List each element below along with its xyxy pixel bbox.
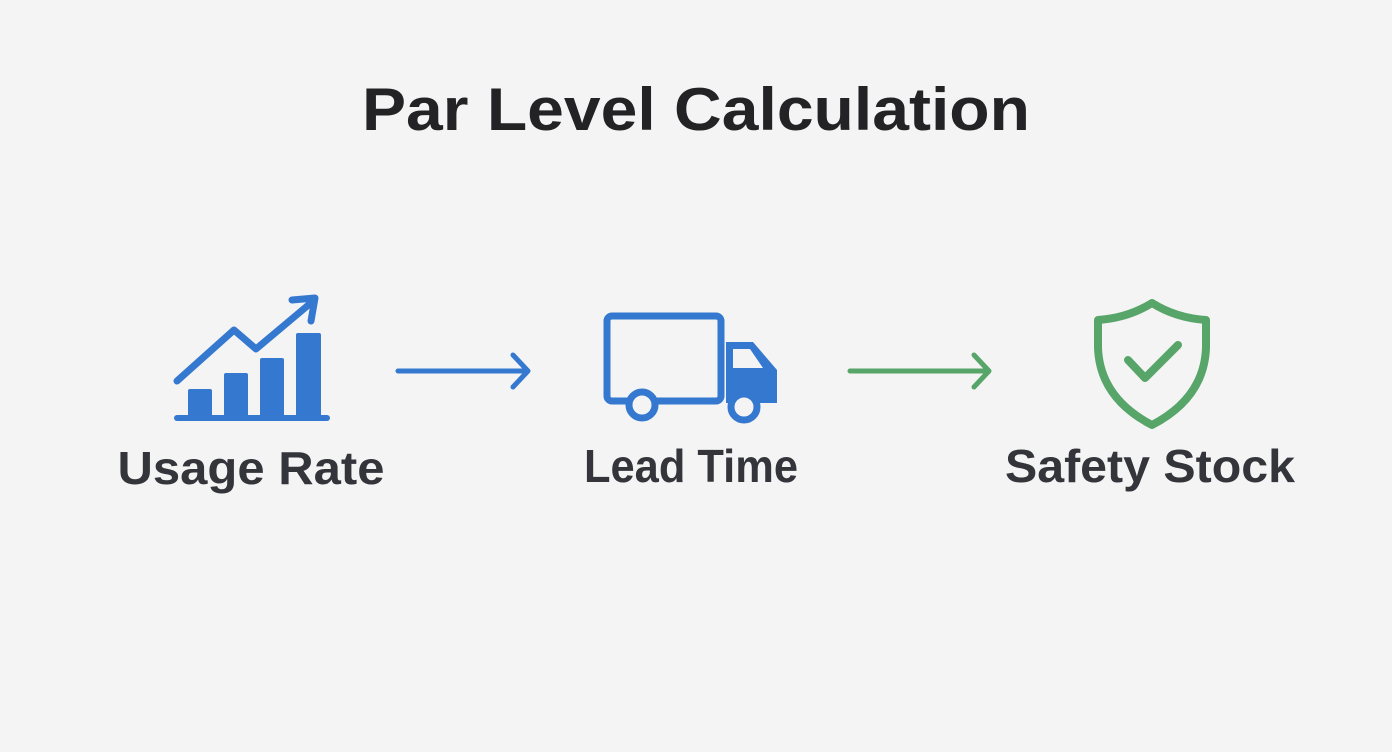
title: Par Level Calculation [362,76,1030,143]
arrow: green [850,355,989,387]
label: lead time: Lead Time [584,440,798,492]
icon: shield [1098,303,1206,425]
label: safety stock: Safety Stock [1005,440,1295,492]
label: usage rate: Usage Rate [118,442,384,494]
icon: truck [607,316,777,420]
arrow: blue [398,355,528,387]
icon: usage chart [174,298,330,421]
